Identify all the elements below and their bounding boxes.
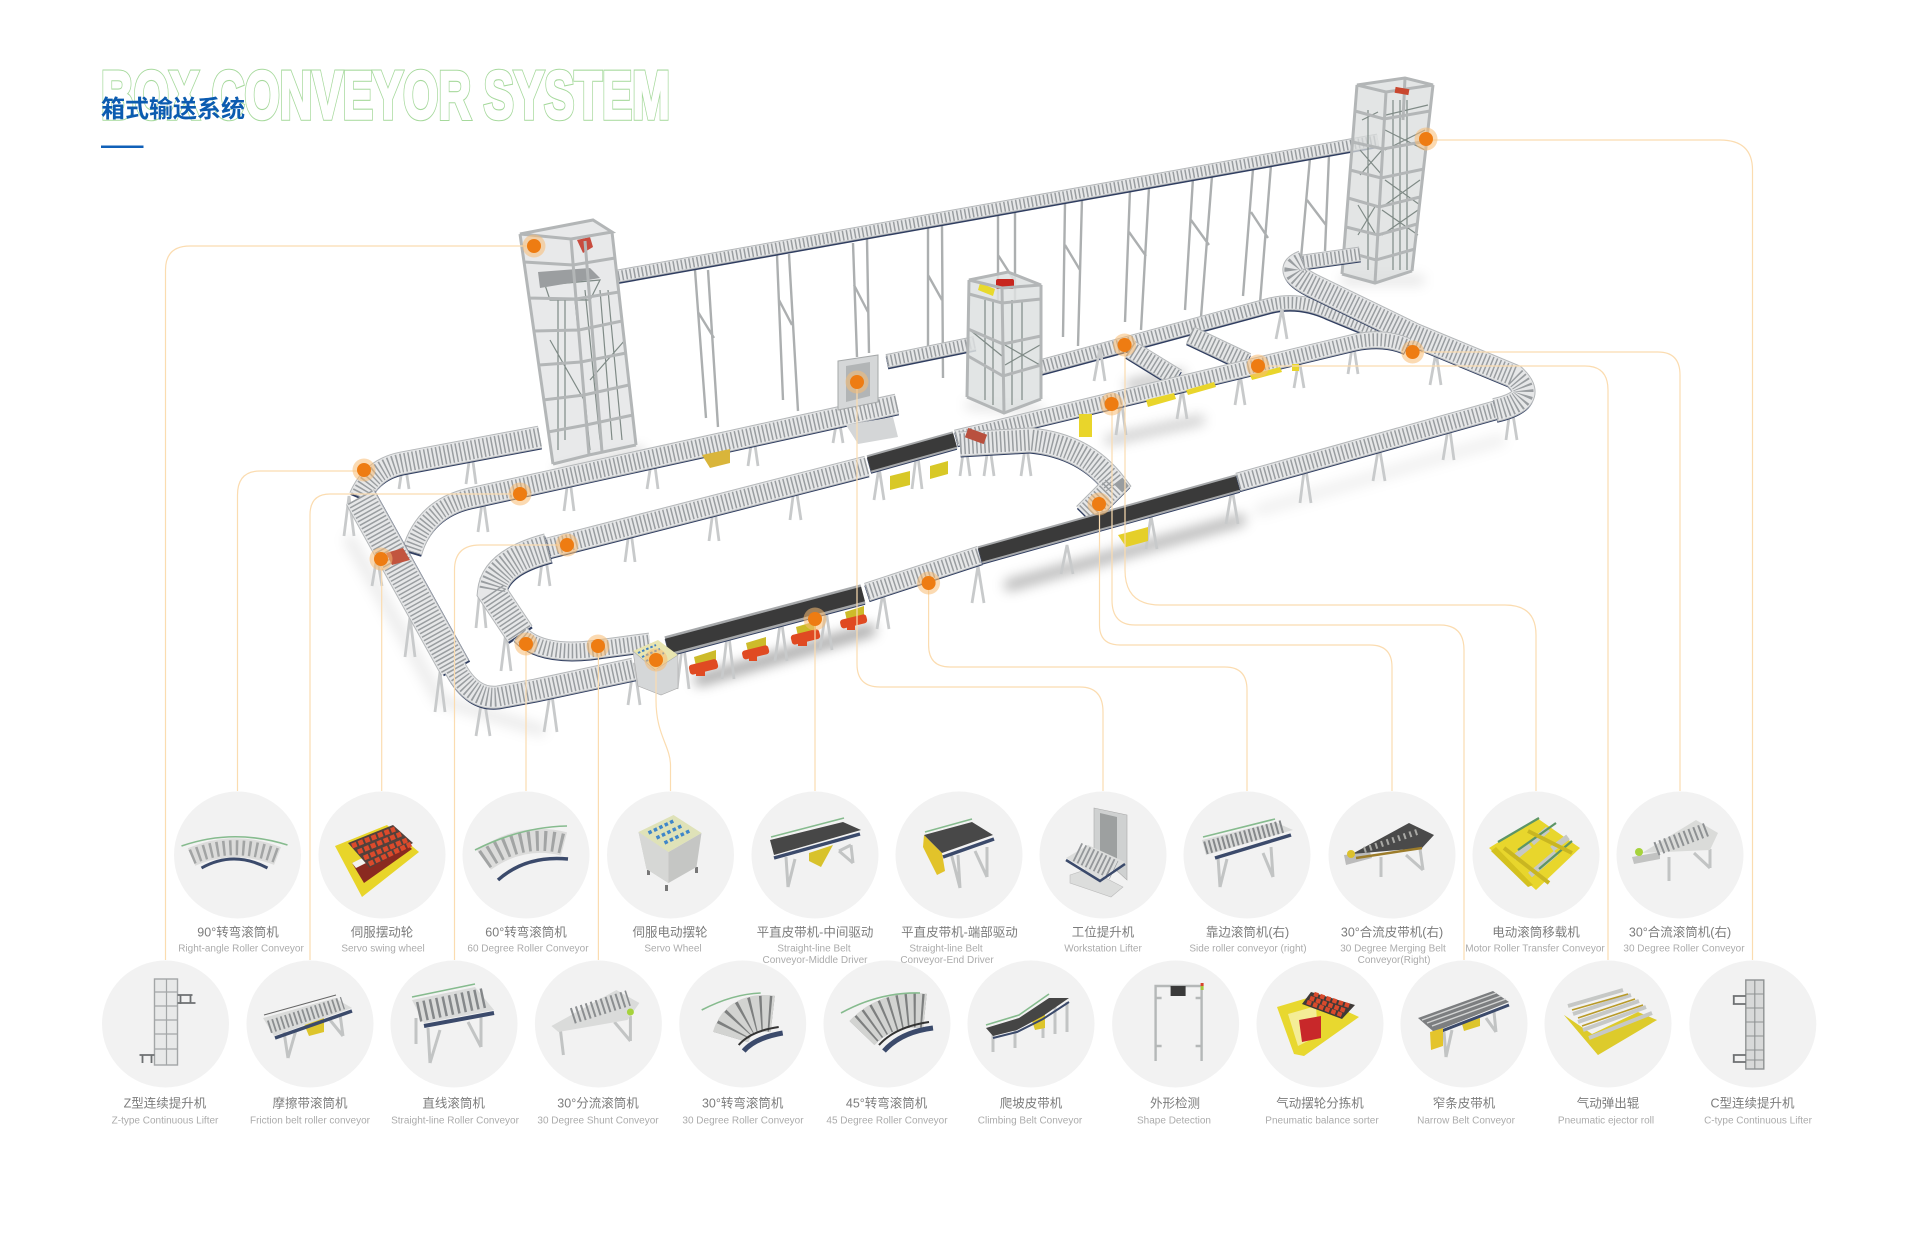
connector lines — [166, 140, 1752, 960]
icon: 60 degree curve — [475, 826, 568, 880]
icon: long rollers on yellow base — [1564, 990, 1657, 1055]
card: straight roller: Straight-line Roller Conveyor — [391, 1116, 520, 1126]
middle lifter tower — [967, 272, 1041, 413]
servo wheel sorter block — [633, 640, 678, 695]
icon: triangular roller bed — [1632, 820, 1718, 881]
inner curve conveyor to belt — [960, 440, 1115, 517]
label: 60°转弯滚筒机 — [485, 924, 567, 940]
lower right perimeter conveyor — [1294, 262, 1524, 412]
label: 平直皮带机-中间驱动 — [757, 924, 873, 940]
card: pneumatic ejector roll — [1544, 960, 1672, 1126]
connector: merging belt — [1100, 504, 1392, 791]
connector: narrow belt — [1112, 404, 1464, 960]
connector: Z-type lifter — [166, 246, 534, 960]
icon: short straight roller — [412, 984, 494, 1063]
red tote on conveyor — [386, 548, 410, 565]
right spiral lifter tower — [1342, 78, 1433, 283]
connector: friction belt roller — [310, 494, 520, 960]
card: straight belt middle driver: Straight-line Belt — [777, 944, 851, 954]
card: servo swing wheel: Servo swing wheel — [341, 944, 425, 954]
label: 气动摆轮分拣机 — [1276, 1096, 1364, 1110]
orange location markers — [352, 128, 1438, 672]
card: 60 degree roller conveyor: 60 Degree Roller Conveyor — [467, 944, 589, 954]
icon: yellow transfer tray — [1489, 818, 1580, 890]
card: narrow belt — [1400, 960, 1528, 1126]
title: outlined English heading — [101, 58, 670, 134]
icon: detection gantry — [1156, 983, 1204, 1061]
connector: motor roller transfer — [1125, 345, 1536, 791]
card: narrow belt: Narrow Belt Conveyor — [1417, 1116, 1516, 1126]
label: 平直皮带机-端部驱动 — [901, 924, 1018, 940]
card: motor roller transfer: Motor Roller Transfer Conveyor — [1465, 944, 1605, 954]
icon: lifter panel and roller deck — [1066, 808, 1127, 897]
card: climbing belt: Climbing Belt Conveyor — [978, 1116, 1083, 1126]
icon: wide curved rollers — [702, 993, 783, 1051]
label: C型连续提升机 — [1710, 1096, 1795, 1110]
inner loop roller conveyor — [492, 466, 867, 653]
card: C-type continuous lifter — [1689, 960, 1816, 1126]
icon: grey cube with blue wheels — [638, 815, 702, 891]
card: C-type continuous lifter: C-type Continuous Lifter — [1704, 1116, 1813, 1126]
connector: straight-line roller — [454, 545, 567, 960]
lower roller section — [867, 555, 980, 594]
icon: inclined belt — [986, 994, 1069, 1052]
yellow drives under upper belt — [890, 461, 948, 490]
back return roller conveyors (top right) — [887, 254, 1398, 369]
floor shadows — [350, 280, 1500, 730]
card: 30 degree shunt — [535, 960, 662, 1126]
label: 30°转弯滚筒机 — [702, 1096, 784, 1110]
icon: 45 degree curved rollers — [841, 993, 933, 1051]
card: 60 degree roller conveyor — [462, 792, 590, 954]
card: 30 degree curve: 30 Degree Roller Conveyor — [682, 1116, 804, 1126]
connector: C-type lifter — [1426, 140, 1752, 960]
icon: C lifter tower — [1733, 980, 1764, 1069]
card: servo swing wheel — [318, 792, 446, 954]
label: 30°合流滚筒机(右) — [1629, 924, 1731, 940]
connector: 30 degree roller — [1412, 352, 1680, 791]
workstation lifter panel — [838, 355, 898, 444]
icon: Z lifter tower — [140, 979, 196, 1065]
card: straight belt end driver — [896, 792, 1022, 966]
label: 电动滚筒移载机 — [1492, 924, 1580, 940]
card: climbing belt — [968, 960, 1094, 1126]
card: straight roller — [390, 960, 520, 1126]
card: straight belt middle driver: Conveyor-Middle Driver — [762, 955, 868, 966]
connector: belt middle driver — [814, 619, 816, 791]
label: 伺服电动摆轮 — [632, 926, 708, 940]
card: straight belt end driver: Straight-line Belt — [909, 944, 983, 954]
cross transfer conveyors — [1130, 335, 1247, 380]
overhead roller conveyor — [618, 140, 1378, 278]
label: 30°合流皮带机(右) — [1341, 924, 1443, 940]
card: pneumatic balance sorter: Pneumatic balance sorter — [1265, 1116, 1379, 1126]
icon: triangular merging belt — [1344, 823, 1434, 877]
connector: 30 degree shunt — [597, 646, 599, 960]
card: side roller conveyor — [1184, 792, 1310, 954]
title: Chinese heading: 箱式输送系统 — [101, 96, 245, 123]
connector: servo wheel — [656, 660, 670, 791]
red servo swing units under belts — [688, 606, 868, 676]
label: 窄条皮带机 — [1433, 1096, 1496, 1110]
card: 30 degree merging belt — [1328, 792, 1456, 966]
card: friction belt roller: Friction belt roller conveyor — [250, 1116, 371, 1126]
label: 30°分流滚筒机 — [557, 1096, 639, 1110]
red tote — [965, 428, 987, 444]
card: straight belt end driver: Conveyor-End Driver — [900, 955, 994, 966]
upper middle belt conveyor — [869, 440, 955, 466]
card: friction belt roller — [246, 960, 374, 1126]
connector: workstation lifter — [857, 382, 1103, 791]
card: side roller conveyor: Side roller conveyor (right) — [1189, 944, 1307, 954]
title: outlined English heading: BOX CONVEYOR SYSTEM — [101, 58, 670, 134]
upper inner merging conveyor — [956, 340, 1407, 440]
label: 伺服摆动轮 — [351, 926, 413, 940]
title: outlined English heading: BOX CONVEYOR SYSTEM — [101, 58, 670, 134]
title underline — [101, 146, 144, 148]
card: 30 degree curve — [679, 960, 806, 1126]
lower belt conveyor near servo units — [667, 594, 863, 648]
connector: 90 degree roller — [238, 471, 364, 791]
card: 90 degree roller conveyor — [174, 792, 304, 954]
card: 30 degree merging belt: 30 Degree Merging Belt — [1340, 944, 1446, 954]
label: 气动弹出辊 — [1577, 1096, 1640, 1110]
icon: triangular shunt bed — [551, 990, 639, 1055]
rack posts under overhead conveyor — [695, 155, 1329, 427]
card: 30 degree merging roller — [1616, 792, 1745, 954]
card: Z-type continuous lifter — [102, 960, 229, 1126]
outer left loop roller conveyor — [360, 437, 634, 699]
yellow drive under long belt — [1118, 527, 1148, 547]
card: pneumatic balance sorter — [1256, 960, 1384, 1126]
icon: belt with middle drive — [770, 818, 861, 887]
label: 爬坡皮带机 — [1000, 1096, 1063, 1110]
icon: roller bed on legs — [1202, 819, 1293, 887]
long lower belt conveyor — [980, 483, 1238, 557]
yellow drive units on merging line — [1079, 364, 1299, 437]
connector: servo swing wheel — [381, 559, 383, 791]
card: servo wheel: Servo Wheel — [644, 944, 702, 954]
card: 45 degree curve — [824, 960, 950, 1126]
label: 45°转弯滚筒机 — [846, 1096, 928, 1110]
card: motor roller transfer — [1465, 792, 1605, 954]
label: 工位提升机 — [1072, 924, 1135, 940]
card: pneumatic ejector roll: Pneumatic ejector roll — [1558, 1116, 1654, 1126]
connector: side roller — [929, 583, 1247, 791]
label: 摩擦带滚筒机 — [272, 1096, 348, 1110]
label: 直线滚筒机 — [422, 1096, 485, 1110]
right lower roller conveyor — [1238, 410, 1495, 484]
icon: narrow belt deck — [1418, 991, 1509, 1057]
icon: yellow frame red rollers — [1277, 992, 1359, 1056]
icon: roller with yellow drive — [263, 995, 352, 1058]
label: Z型连续提升机 — [124, 1096, 207, 1110]
label: 90°转弯滚筒机 — [197, 924, 279, 940]
card: shape detection — [1112, 960, 1239, 1126]
yellow drive under mid row — [702, 449, 730, 468]
label: 外形检测 — [1150, 1096, 1200, 1110]
card: Z-type continuous lifter: Z-type Continuous Lifter — [112, 1116, 219, 1126]
card: straight belt middle driver — [752, 792, 878, 966]
icon: yellow box with red rollers — [335, 825, 419, 897]
connector: 60 degree roller — [525, 644, 527, 791]
card: 30 degree shunt: 30 Degree Shunt Conveyor — [537, 1116, 659, 1126]
conveyor system illustration — [344, 78, 1524, 736]
card: 90 degree roller conveyor: Right-angle Roller Conveyor — [178, 944, 304, 954]
card: workstation lifter: Workstation Lifter — [1064, 944, 1142, 954]
icon: short belt with end drive — [923, 819, 994, 888]
card: 30 degree merging roller: 30 Degree Roller Conveyor — [1623, 944, 1745, 954]
left lifter tower — [520, 220, 636, 464]
card: servo wheel — [607, 792, 734, 954]
card: shape detection: Shape Detection — [1137, 1116, 1211, 1126]
mid roller row from left loop — [412, 404, 897, 554]
label: 靠边滚筒机(右) — [1206, 924, 1289, 940]
card: workstation lifter — [1040, 792, 1166, 954]
card: 30 degree merging belt: Conveyor(Right) — [1358, 955, 1430, 966]
supports and legs — [344, 309, 1517, 736]
card: 45 degree curve: 45 Degree Roller Conveyor — [826, 1116, 948, 1126]
icon: 90 degree curve — [182, 837, 288, 868]
connector: pneumatic ejector — [1258, 366, 1608, 960]
